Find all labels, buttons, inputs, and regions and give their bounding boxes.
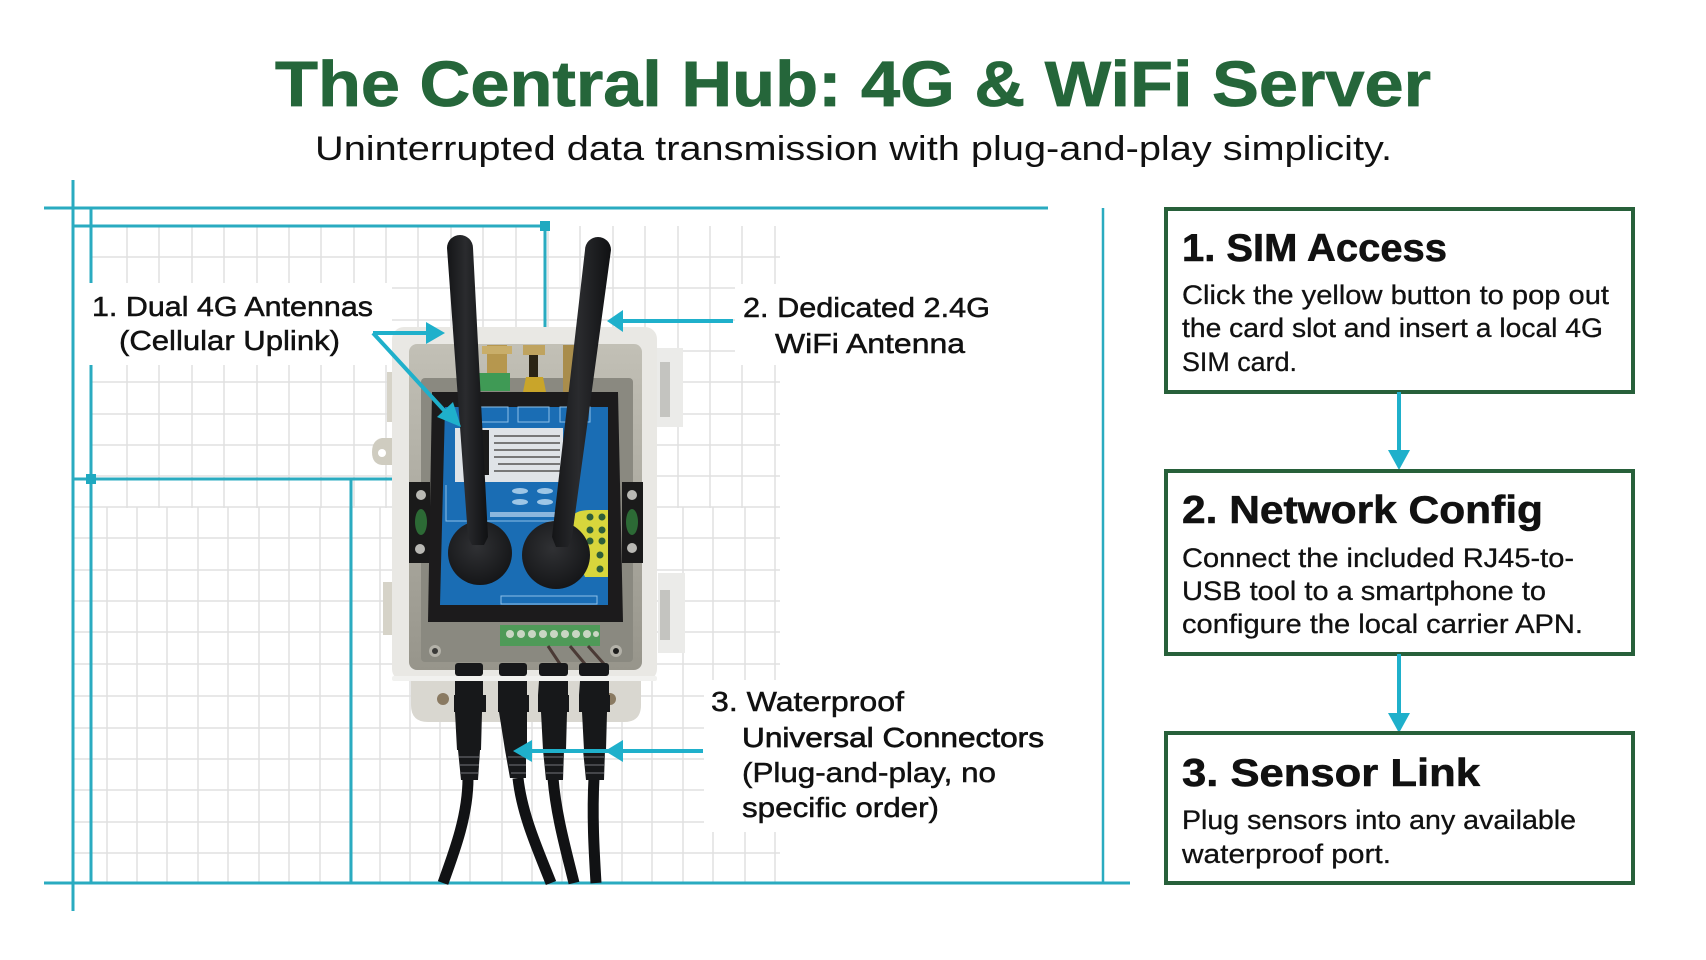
arrow: WiFi antenna (607, 310, 733, 332)
label: waterproof connectors: 3. Waterproof (711, 686, 904, 717)
label: waterproof connectors: (Plug-and-play, no (742, 757, 996, 788)
panel: step 1 SIM access: SIM card. (1182, 347, 1297, 377)
mounting brackets (409, 482, 643, 563)
panel: step 3 sensor link: 3. Sensor Link (1182, 752, 1480, 795)
arrows: dual 4G antennas (373, 322, 461, 427)
title: The Central Hub: 4G & WiFi Server (275, 48, 1431, 120)
panel: step 2 network config: configure the local carrier APN. (1182, 609, 1583, 639)
enclosure mounting tabs and hinges (372, 348, 685, 653)
label: WiFi antenna: 2. Dedicated 2.4G (743, 292, 990, 323)
enclosure body (392, 327, 657, 681)
panel: step 3 sensor link (1166, 733, 1633, 883)
label: dual 4G antennas: 1. Dual 4G Antennas (92, 291, 373, 322)
antenna: left 4G (447, 235, 512, 585)
green terminal block (500, 625, 600, 646)
panel: step 1 SIM access: Click the yellow button to pop out (1182, 280, 1610, 310)
label: dual 4G antennas: (Cellular Uplink) (119, 325, 340, 356)
waterproof connectors and cables (443, 681, 610, 883)
label: WiFi antenna: WiFi Antenna (775, 328, 965, 359)
subtitle: Uninterrupted data transmission with plug-and-play simplicity. (315, 130, 1392, 168)
label: WiFi antenna (743, 292, 990, 359)
blue front panel (440, 407, 608, 605)
antenna: WiFi (522, 237, 611, 589)
panel: step 2 network config: Connect the included RJ45-to- (1182, 543, 1574, 573)
arrows: connectors (513, 740, 703, 762)
panel: step 1 SIM access: 1. SIM Access (1182, 227, 1447, 270)
inner cable glands (455, 663, 609, 676)
panel: step 3 sensor link: Plug sensors into any available (1182, 805, 1576, 835)
label: waterproof connectors (711, 686, 1044, 823)
panel: step 3 sensor link: waterproof port. (1181, 839, 1391, 869)
panel: step 1 SIM access: the card slot and insert a local 4G (1182, 313, 1603, 343)
label: waterproof connectors: Universal Connectors (742, 722, 1044, 753)
arrow: step 2 to step 3 (1388, 654, 1410, 733)
antenna connectors (478, 345, 575, 392)
label: waterproof connectors: specific order) (742, 792, 939, 823)
server module (428, 392, 623, 622)
arrow: step 1 to step 2 (1388, 392, 1410, 470)
panel: step 2 network config: USB tool to a smartphone to (1182, 576, 1546, 606)
lower flange (411, 675, 641, 722)
label: dual 4G antennas (92, 291, 373, 356)
panel: step 2 network config (1166, 471, 1633, 654)
panel: step 2 network config: 2. Network Config (1182, 489, 1543, 532)
panel: step 1 SIM access (1166, 209, 1633, 392)
photo: weatherproof enclosure with 4G server (372, 235, 685, 883)
